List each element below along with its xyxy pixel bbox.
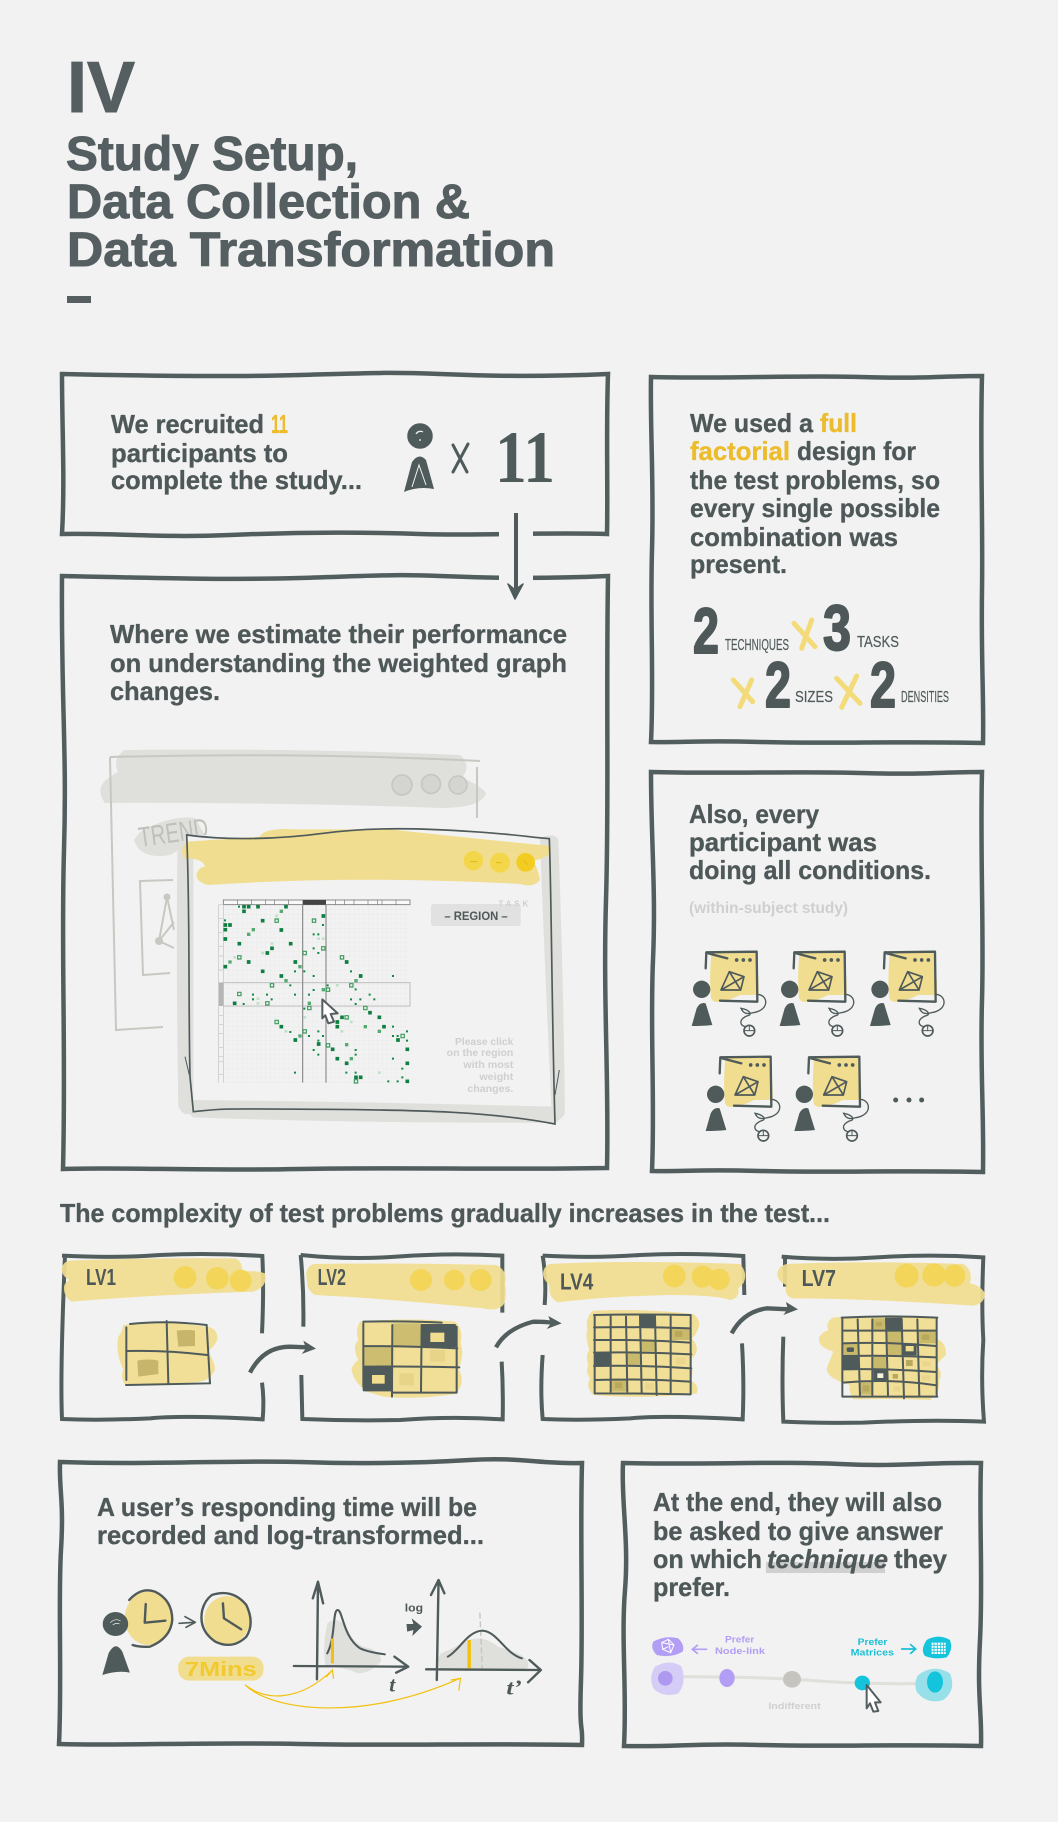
title block [66,48,555,303]
panel: technique preference [623,1463,981,1746]
recruit text: We recruited [111,409,264,439]
factorial text: We used a [690,408,814,438]
arrow: panel to panel [499,513,533,599]
factor equation: DENSITIES [901,689,949,706]
factorial text [690,408,940,579]
panel: recruited participants [62,373,608,536]
level 2 window [301,1254,506,1420]
levels left pair [61,1254,562,1420]
preference text: be asked to give answer [653,1516,943,1546]
task instruction: with most [462,1060,514,1071]
multiply sign [453,444,468,472]
cursor [867,1685,881,1712]
7 Mins label [178,1657,264,1681]
level 1 window: LV1 [86,1264,116,1290]
factor equation [693,592,949,721]
factorial text: combination was [690,522,898,552]
preference text: on which [653,1544,762,1574]
log label and arrow: log [405,1602,423,1614]
heading: Data Collection & [67,176,470,229]
task instruction: on the region [447,1048,513,1059]
factor equation: 2 [693,595,719,667]
chart: raw time [294,1582,408,1697]
preference text: technique [767,1544,888,1574]
factorial text: full [820,408,857,438]
region tag: TASK [498,900,529,909]
chart: raw time: t [389,1673,396,1697]
heading: Data Transformation [67,224,555,277]
conditions text: doing all conditions. [689,855,931,885]
responding time text: A user’s responding time will be [97,1492,477,1522]
levels right pair [541,1254,985,1423]
7 Mins label: 7Mins [185,1658,257,1681]
matrices label: Matrices [851,1648,894,1658]
hand-drawn 11: 11 [495,417,555,499]
arrow 1 [250,1347,307,1373]
log-transform sketch [102,1580,541,1708]
factor equation: SIZES [795,689,833,706]
scale track [667,1677,930,1684]
level 1 window [61,1254,266,1420]
chart: log time: t’ [506,1676,522,1699]
preference text: At the end, they will also [653,1487,942,1517]
recruit text: participants to [111,438,288,468]
factor equation: 2 [765,649,791,721]
icons: participants at screens [692,951,944,1141]
level 7 window: LV7 [802,1265,836,1291]
responding time text: recorded and log-transformed... [97,1520,484,1550]
factorial text: every single possible [690,493,940,523]
factor equation: 2 [870,649,896,721]
matrices label: Prefer [858,1637,888,1647]
adjacency matrix [219,900,410,1083]
icon: user and clocks [102,1590,251,1675]
heading: Study Setup, [66,128,358,181]
conditions text: participant was [689,827,877,857]
icon: participant [404,424,434,492]
recruit text: 11 [271,409,288,439]
preference text: prefer. [653,1572,730,1602]
task instruction: weight [478,1072,514,1083]
panel: factorial design [651,376,983,743]
title dash [67,296,91,303]
chart: log time [426,1580,541,1699]
factorial text: present. [690,549,787,579]
preference scale [651,1635,952,1712]
factorial text: the test problems, so [690,465,940,495]
scale points [651,1662,952,1701]
task instruction: changes. [467,1084,514,1095]
sketch: task window [177,829,565,1124]
cursor [322,999,338,1023]
node-link label: Prefer [725,1635,755,1645]
complexity heading: The complexity of test problems gradually increases in the test... [60,1198,830,1228]
conditions text: Also, every [689,799,820,829]
factor equation: TASKS [857,634,899,651]
preference text: they [894,1544,948,1574]
log label and arrow [405,1602,423,1636]
panel: responding time [59,1459,582,1745]
factor equation: TECHNIQUES [725,637,789,654]
performance text: Where we estimate their performance [110,619,567,649]
recruit text: complete the study... [111,465,362,495]
node-link label: Node-link [715,1646,766,1656]
recruit text [111,409,362,495]
panel: performance estimate [62,575,608,1170]
level 4 window [541,1254,745,1420]
indifferent label: Indifferent [768,1701,821,1711]
performance text: changes. [110,676,220,706]
node-link label [652,1635,766,1656]
panel: within-subject [651,772,983,1172]
task instruction [447,1037,514,1095]
sketch: background window [100,750,486,1030]
factorial text: factorial [690,436,790,466]
task instruction: Please click [455,1037,514,1048]
region tag [431,900,529,926]
level 7 window [777,1256,985,1423]
sketch: background window: TREND [137,813,210,853]
level 4 window: LV4 [560,1268,593,1294]
arrow 2 [496,1322,553,1347]
factor equation: 3 [823,592,851,664]
matrices label [851,1637,951,1658]
factorial text: design for [797,436,916,466]
section numeral: IV [67,48,135,128]
region tag: – REGION – [444,909,508,923]
performance text: on understanding the weighted graph [110,648,567,678]
arrow 3 [732,1308,788,1333]
conditions text [689,799,931,917]
level 2 window: LV2 [318,1264,346,1290]
conditions text: (within-subject study) [689,900,848,917]
performance text [110,619,567,706]
responding time text [97,1492,484,1550]
yellow pointer arrows [245,1670,461,1708]
preference text [653,1487,948,1602]
heading [66,128,555,277]
